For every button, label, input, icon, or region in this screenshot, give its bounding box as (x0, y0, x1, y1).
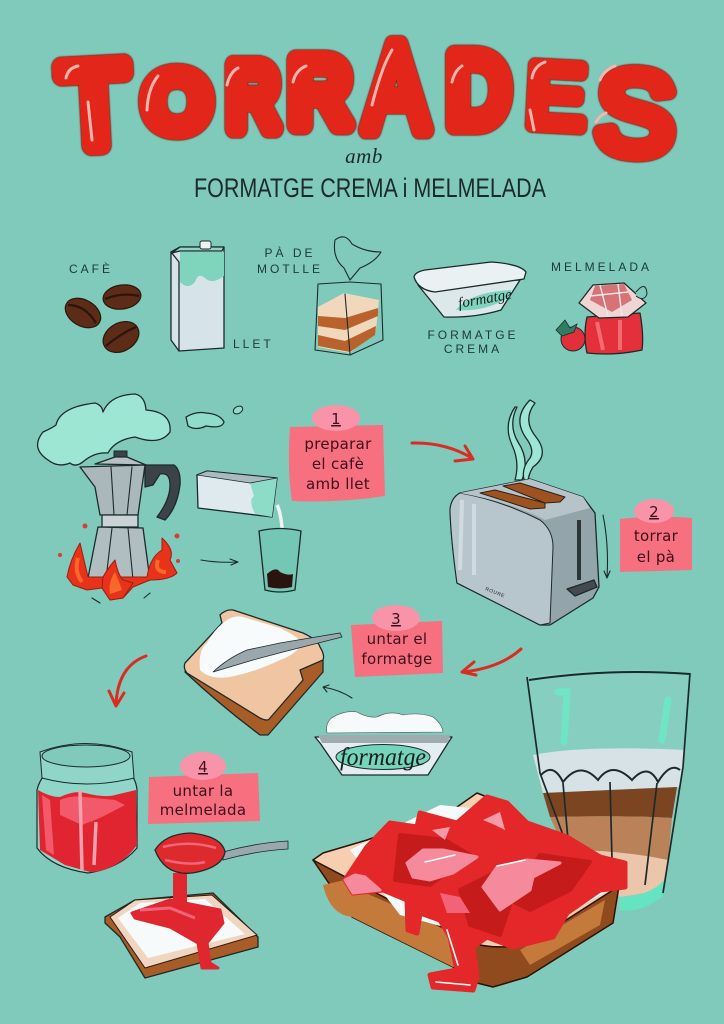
label: formatge crema: FORMATGE (427, 328, 519, 342)
icon: cream cheese tub: formatge (457, 287, 513, 312)
arrow: to step 3 (462, 649, 521, 675)
step 2: note: 2 (649, 503, 659, 521)
title: A (365, 20, 427, 157)
label: cafè: CAFÈ (69, 261, 113, 276)
label: melmelada: MELMELADA (551, 260, 652, 274)
step 3: open cheese tub: formatge (340, 744, 426, 771)
ingredient: pà de motlle (257, 237, 383, 355)
ingredient: cafè (60, 261, 144, 359)
step 3: open cheese tub (315, 712, 452, 775)
icon: milk carton (171, 241, 224, 351)
final: glass of coffee with milk (527, 670, 690, 911)
ingredient: melmelada (551, 260, 652, 354)
step 4: note (148, 752, 260, 824)
toaster: ROURE (484, 586, 506, 600)
step 1: glass with coffee (259, 528, 301, 592)
ingredient: llet (171, 241, 274, 351)
final: toast with jam (313, 793, 625, 990)
title: E (524, 45, 588, 147)
title: R (289, 41, 351, 146)
step 1: note: amb llet (306, 475, 370, 493)
step 1: note: 1 (331, 410, 341, 428)
step 4: note: 4 (198, 758, 208, 776)
title: R (227, 47, 279, 148)
title (58, 20, 678, 180)
step 3: note (351, 605, 443, 677)
arrow: to step 4 (109, 656, 146, 706)
title: T (58, 39, 132, 172)
label: llet: LLET (233, 337, 274, 351)
subtitle: amb: amb (345, 144, 383, 168)
step 4: jam jar (37, 744, 137, 873)
step 3: toast with cream cheese and knife (184, 610, 342, 735)
step 2: note (620, 499, 692, 572)
step 1: flames (58, 524, 180, 603)
icon: jam jar (579, 283, 647, 354)
step 2: note: torrar (634, 527, 679, 545)
title: D (447, 33, 509, 147)
step 1: note (289, 405, 385, 501)
step 1: note: preparar (304, 435, 372, 453)
label: formatge crema: CREMA (444, 342, 502, 356)
step 1: pouring milk carton (197, 471, 284, 565)
step 2: note: el pà (637, 548, 675, 566)
step 4: toast with jam (105, 893, 258, 978)
ingredient: formatge crema (414, 262, 526, 356)
icon: strawberry (556, 320, 585, 351)
step 3: note: formatge (361, 650, 433, 668)
step 1: note: el cafè (312, 455, 364, 473)
step 3: note: 3 (391, 610, 401, 628)
step 1: moka pot (80, 451, 180, 580)
label: pà de motlle: MOTLLE (257, 262, 323, 276)
title: O (145, 57, 209, 147)
step 3: note: untar el (367, 630, 427, 648)
step 4: note: untar la (173, 782, 233, 800)
step 3: small arrow (323, 685, 352, 698)
icon: coffee beans (60, 282, 144, 359)
icon: bread bag (315, 237, 383, 355)
steam over toaster (508, 400, 542, 483)
toaster (450, 479, 610, 625)
arrow: to toaster (412, 443, 473, 461)
title: S (593, 46, 678, 180)
step 4: spoon with jam (155, 833, 288, 905)
step 1: small arrow (201, 559, 238, 565)
label: pà de motlle: PÀ DE (264, 245, 316, 260)
step 4: note: melmelada (160, 801, 246, 819)
step 1: cloud steam (38, 394, 244, 465)
subtitle: formatge crema i melmelada: FORMATGE CREMA i MELMELADA (194, 173, 546, 203)
